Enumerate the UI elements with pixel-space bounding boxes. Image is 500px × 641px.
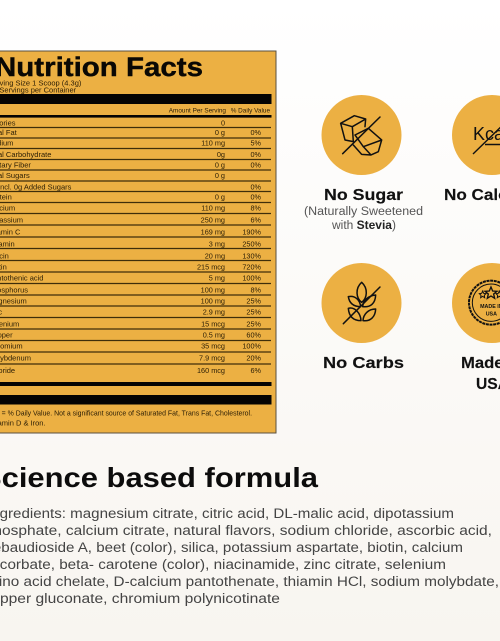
nutrient table: 15 mcg: [201, 320, 225, 328]
nutrient table: 100 mg: [201, 296, 225, 306]
icon: crossed wheat: [343, 282, 380, 324]
panel: nutrition facts: [0, 51, 276, 433]
nutrient table: 160 mcg: [197, 366, 225, 375]
nutrient table: 169 mg: [201, 228, 225, 236]
nutrient table: 8%: [250, 286, 262, 294]
badge: no carbs: [322, 263, 404, 372]
nutrient table: Incl. 0g Added Sugars: [0, 182, 72, 192]
nutrient table: 0 g: [215, 171, 225, 180]
nutrient table: 5%: [250, 138, 262, 148]
label: No Sugar: [324, 187, 403, 204]
column headers: % Daily Value: [231, 108, 270, 114]
icon: made in USA seal: USA: [486, 311, 497, 317]
heading: Nutrition Facts: Nutrition Facts: [0, 52, 203, 82]
nutrient table: 3 mg: [209, 240, 225, 248]
nutrient table: 5 mg: [209, 274, 225, 282]
nutrient table: 6%: [250, 216, 262, 224]
nutrient table: 100 mg: [201, 286, 225, 294]
nutrient table: [0, 118, 271, 375]
badge: no sugar: [304, 95, 423, 232]
nutrient table: 25%: [246, 308, 262, 316]
nutrient table: 720%: [242, 262, 262, 272]
column headers: Amount Per Serving: [169, 108, 226, 114]
icon: crossed sugar cubes: [341, 116, 382, 155]
nutrient table: 35 mcg: [201, 342, 225, 350]
ingredients text: [0, 506, 499, 606]
nutrient table: 130%: [242, 252, 262, 260]
nutrient table: 0 g: [215, 160, 225, 170]
nutrient table: 100%: [242, 342, 262, 350]
nutrient table: 0%: [250, 182, 262, 192]
nutrient table: 110 mg: [201, 204, 225, 212]
nutrient table: 190%: [242, 228, 262, 236]
nutrient table: 100%: [242, 274, 262, 282]
column headers: [169, 108, 270, 114]
label: No Carbs: [323, 355, 404, 372]
sublabel: (Naturally Sweetened: [304, 206, 423, 218]
nutrient table: 0 g: [215, 192, 225, 202]
nutrient table: 0.5 mg: [203, 330, 225, 340]
footnote: [0, 408, 252, 428]
bottom black bar: [0, 395, 272, 404]
nutrient table: 0g: [217, 150, 225, 159]
nutrient table: 0%: [250, 192, 262, 202]
sublabel: [304, 206, 423, 232]
nutrient table: 250%: [242, 240, 262, 248]
nutrient table: 250 mg: [201, 216, 225, 224]
nutrient table: 215 mcg: [197, 262, 225, 272]
footnote: * = % Daily Value. Not a significant source of Saturated Fat, Trans Fat, Cholesterol.: [0, 408, 252, 418]
serving information: [0, 78, 82, 94]
nutrient table: 0 g: [215, 128, 225, 137]
top black bar: [0, 94, 272, 104]
nutrient table: 20%: [246, 354, 262, 362]
badge: no calories: [444, 95, 500, 204]
nutrient table: 6%: [250, 366, 262, 375]
nutrient table: 0%: [250, 150, 262, 159]
label: [461, 355, 500, 393]
nutrient table: 0: [221, 118, 225, 128]
sublabel: with Stevia): [331, 220, 396, 232]
nutrient table: 7.9 mcg: [199, 354, 225, 362]
icon: made in USA seal: [469, 281, 500, 325]
nutrient table: 25%: [246, 320, 262, 328]
nutrient table: 0%: [250, 160, 262, 170]
badge: made in USA: [452, 263, 500, 393]
nutrient table: 25%: [246, 296, 262, 306]
nutrient table: 60%: [246, 330, 262, 340]
nutrient table: 110 mg: [201, 138, 225, 148]
nutrient table: 2.9 mg: [203, 308, 225, 316]
nutrient table: 0%: [250, 128, 262, 137]
nutrient table: 8%: [250, 204, 262, 212]
nutrient table: 20 mg: [205, 252, 225, 260]
